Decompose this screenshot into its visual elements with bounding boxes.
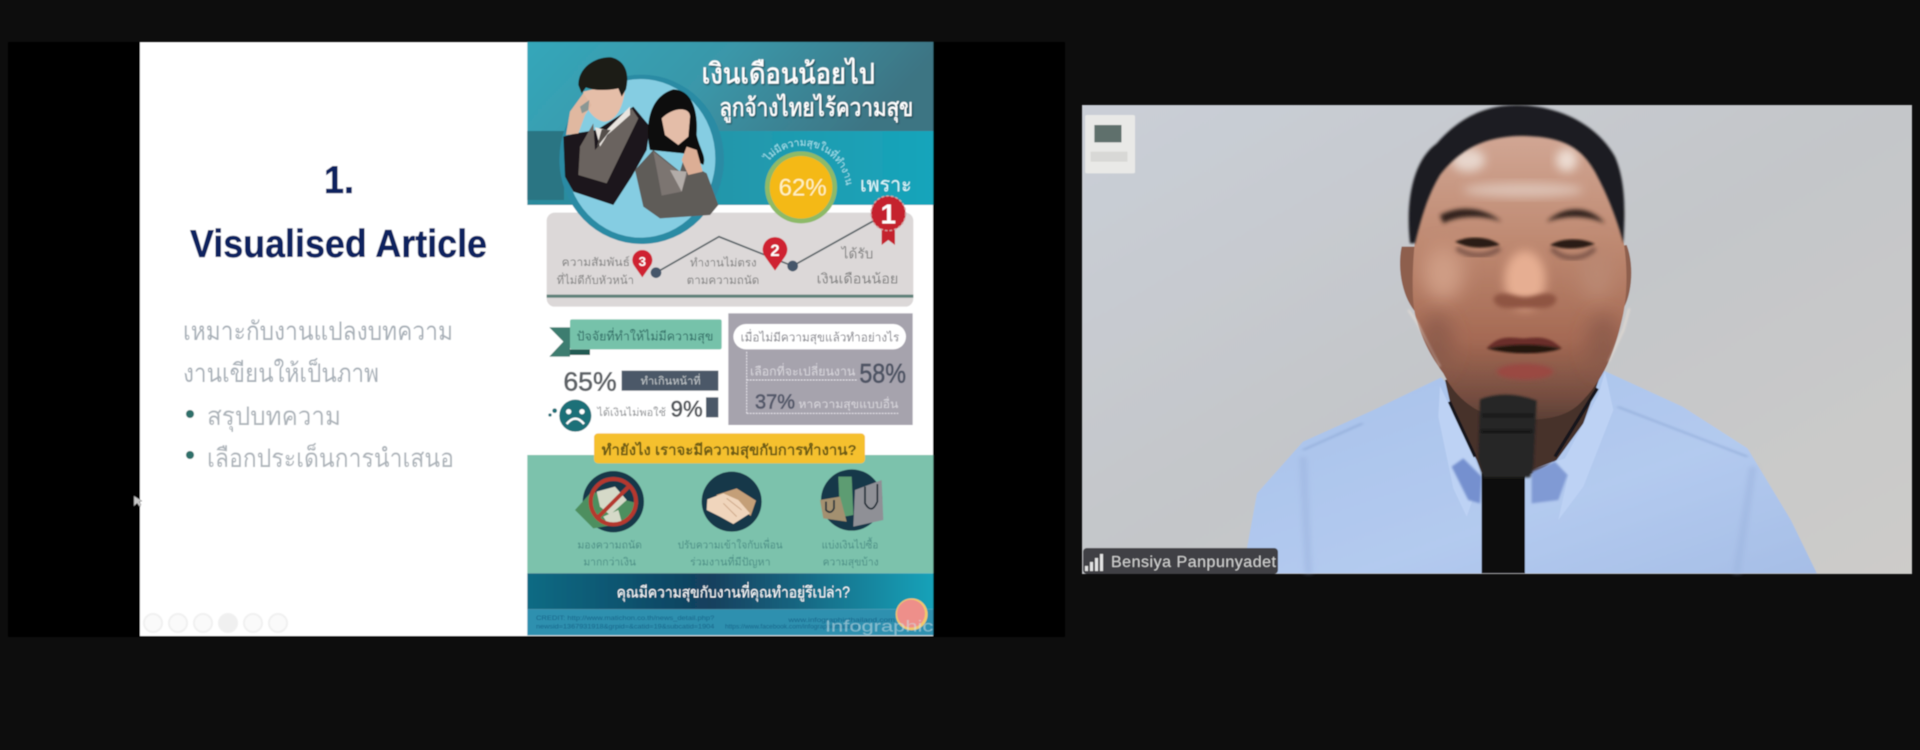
banner: ทำยังไง เราจะมีความสุขกับการทำงาน? — [602, 441, 857, 459]
icon: shopping bags — [820, 469, 883, 531]
panel: infographic header — [526, 40, 934, 307]
icon: pin 2: 2 — [770, 241, 780, 260]
closing question band — [527, 573, 933, 609]
heading: slide number: 1. — [324, 159, 354, 202]
closing question band: คุณมีความสุขกับงานที่คุณทำอยู่รึเปล่า? — [617, 581, 850, 602]
bullet list: เลือกประเด็นการนำเสนอ — [207, 442, 454, 473]
title — [702, 57, 913, 123]
credits footer: Infographic — [825, 618, 933, 635]
presenter head — [1400, 105, 1631, 420]
name tag — [1083, 548, 1278, 574]
woman — [635, 89, 718, 218]
tips text: มองความถนัด — [577, 540, 642, 552]
icon: pin 3: 3 — [639, 254, 646, 269]
text block: slide description: เหมาะกับงานแปลงบทความ — [183, 316, 453, 346]
text block: slide description — [183, 316, 453, 388]
reason labels: เงินเดือนน้อย — [817, 270, 898, 286]
panel: infographic — [526, 40, 934, 637]
panel: infographic lower section — [527, 313, 933, 635]
reason labels: ตามความถนัด — [687, 275, 759, 287]
credits footer — [527, 598, 933, 635]
reason labels — [557, 246, 898, 287]
icon: pin 2 — [763, 237, 787, 271]
reason labels: ที่ไม่ดีกับหัวหน้า — [557, 272, 634, 287]
panel: what people do: 37% — [755, 390, 795, 413]
stat: 65 percent: ทำเกินหน้าที่ — [641, 374, 701, 388]
stat: 9 percent: 9% — [671, 397, 703, 422]
slideshow controls — [144, 614, 287, 632]
tips text — [577, 537, 879, 568]
stat: 65 percent — [563, 367, 718, 397]
badge: 62 percent: 62% — [779, 175, 827, 202]
title: ลูกจ้างไทยไร้ความสุข — [719, 94, 913, 123]
icon: wall thermostat — [1085, 115, 1135, 173]
bullet list — [186, 401, 454, 473]
ribbon heading: causes — [549, 319, 722, 357]
badge: 62 percent — [761, 139, 852, 224]
tips text: แบ่งเงินไปซื้อ — [822, 537, 878, 552]
icon: no money — [575, 471, 644, 532]
gray reasons panel — [547, 213, 913, 307]
credits footer: newsid=1367931918&grpid=&catid=19&subcatid=1904 — [536, 625, 715, 631]
heading: slide title: Visualised Article — [190, 223, 487, 266]
icon: rosette 1: 1 — [881, 198, 896, 229]
reason labels: ทำงานไม่ตรง — [690, 257, 757, 270]
ranked reasons line chart — [557, 196, 906, 287]
name tag: Bensiya Panpunyadet — [1111, 554, 1277, 571]
panel: what people do — [728, 313, 913, 425]
panel: presentation slide — [8, 40, 1065, 637]
panel: what people do: เมื่อไม่มีความสุขแล้วทำอย่างไร — [741, 328, 900, 345]
icon: mouse cursor — [134, 496, 142, 507]
reason labels: ความสัมพันธ์ — [562, 255, 630, 269]
tips text: ปรับความเข้าใจกับเพื่อน — [678, 538, 783, 552]
panel: what people do: หาความสุขแบบอื่น — [798, 396, 899, 411]
text block: slide description: งานเขียนให้เป็นภาพ — [183, 357, 379, 388]
credits footer: https://www.facebook.com/infographicthailand — [725, 625, 858, 631]
panel: presenter video — [1082, 105, 1912, 574]
man — [563, 57, 650, 205]
panel: how to be happy — [527, 433, 933, 573]
stat: 65 percent: 65% — [563, 367, 617, 397]
ribbon heading: causes: ปัจจัยที่ทำให้ไม่มีความสุข — [577, 328, 713, 345]
icon: sad face — [548, 400, 591, 432]
microphone — [1478, 395, 1537, 573]
panel: what people do: เลือกที่จะเปลี่ยนงาน — [750, 362, 855, 378]
tips text: ร่วมงานที่มีปัญหา — [690, 554, 771, 568]
presenter neck and collar — [1438, 367, 1613, 520]
panel: slide text area — [140, 42, 528, 636]
credits footer: www.infographicthailand.com — [787, 618, 895, 624]
stat: 9 percent — [596, 397, 718, 422]
bullet list: สรุปบทความ — [207, 401, 341, 432]
tips text: มากกว่าเงิน — [583, 556, 637, 568]
tips text: ความสุขบ้าง — [823, 556, 879, 568]
stat: 9 percent: ได้เงินไม่พอใช้ — [596, 406, 666, 419]
illustration: worried couple — [559, 57, 724, 244]
credits footer: CREDIT: http://www.matichon.co.th/news_detail.php? — [536, 616, 715, 622]
title: เงินเดือนน้อยไป — [702, 57, 875, 90]
banner — [594, 433, 865, 463]
reason labels: ได้รับ — [841, 246, 873, 262]
icon: rosette 1 — [871, 196, 906, 245]
panel: what people do: 58% — [859, 359, 906, 389]
presenter torso and shirt — [1242, 371, 1817, 573]
badge: 62 percent: ไม่มีความสุขในที่ทำงาน — [761, 139, 852, 186]
icon: handshake — [702, 472, 762, 532]
icon: pin 3 — [632, 250, 652, 277]
text: because: เพราะ — [860, 173, 912, 196]
icon: signal bars — [1085, 554, 1103, 571]
